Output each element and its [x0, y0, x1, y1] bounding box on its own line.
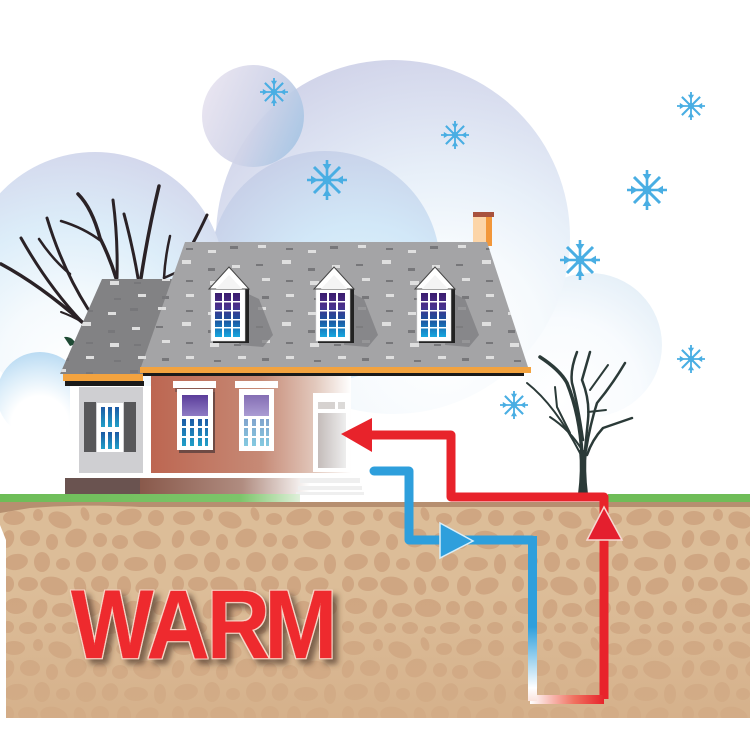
right bare tree	[527, 352, 632, 494]
soil ground	[0, 502, 750, 718]
wing roof	[60, 279, 172, 374]
foundation	[65, 478, 310, 494]
warm air pipe (red)	[341, 418, 622, 704]
background winter sky clouds	[0, 60, 662, 438]
cool air pipe (blue)	[374, 471, 537, 701]
dormers	[209, 267, 479, 347]
door	[313, 393, 350, 472]
wing wall	[70, 386, 151, 475]
lower windows	[173, 381, 278, 453]
grass	[0, 494, 750, 504]
WARM label: WARM	[71, 570, 337, 679]
snowflakes	[260, 78, 705, 419]
house	[60, 242, 531, 495]
steps	[296, 478, 364, 495]
brick wall	[151, 376, 351, 473]
main roof	[141, 242, 528, 367]
eaves	[63, 367, 531, 386]
left bare tree	[1, 186, 207, 346]
chimney	[473, 212, 494, 246]
